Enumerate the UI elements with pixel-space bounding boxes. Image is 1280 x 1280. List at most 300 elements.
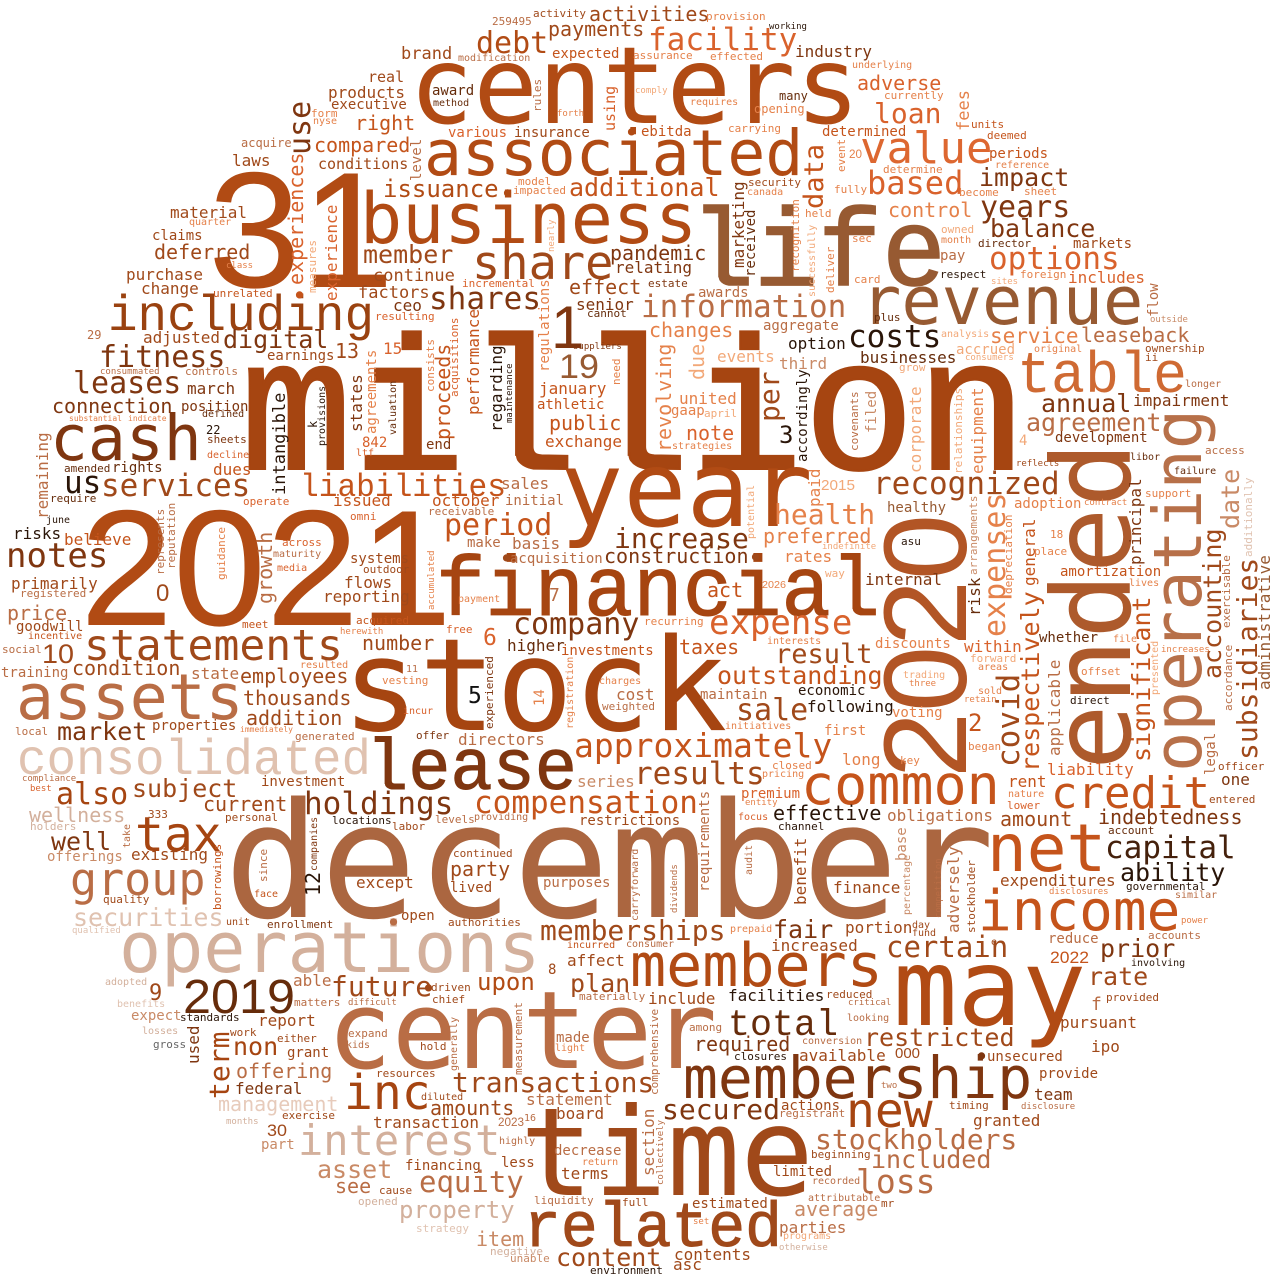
small words: centre: athletic xyxy=(537,397,604,413)
small words: centre: preferred xyxy=(763,524,871,548)
small words: left side: june xyxy=(46,515,70,526)
small words: left side: • xyxy=(292,281,307,310)
small words: centre: awards xyxy=(698,285,749,301)
small words: right side: within xyxy=(964,637,1022,656)
small words: centre: decrease xyxy=(554,1143,621,1159)
small words: centre: comprehensive xyxy=(648,1009,661,1095)
small words: right side: disclosure xyxy=(1021,1102,1075,1112)
small words: centre: effective xyxy=(773,801,881,825)
small words: right side: prior xyxy=(1100,934,1175,963)
small words: right side: adoption xyxy=(1014,496,1081,512)
small words: centre: actions xyxy=(781,1098,840,1114)
small words: left side: used xyxy=(184,1025,203,1064)
small words: right side: subsidiaries xyxy=(1231,558,1264,760)
small words: top arc: held xyxy=(805,207,832,220)
small words: top arc: 259495 xyxy=(492,15,532,28)
small words: left side: 13 xyxy=(335,339,359,363)
small words: left side: connection xyxy=(52,394,172,418)
small words: top arc: event xyxy=(835,139,848,172)
small words: top arc: data xyxy=(799,144,830,209)
small words: centre: accordingly xyxy=(795,369,811,462)
small words: centre: free xyxy=(446,623,472,636)
small words: right side: accounts xyxy=(1148,929,1201,942)
small words: left side: leases xyxy=(73,366,181,401)
small words: left side: locations xyxy=(332,814,392,827)
small words: left side: earnings xyxy=(267,348,334,364)
small words: left side: employees xyxy=(240,664,348,688)
small words: centre: • xyxy=(499,544,514,573)
small words: left side: qualified xyxy=(72,926,121,936)
small words: top arc xyxy=(232,2,1188,325)
small words: centre: providing xyxy=(474,812,528,823)
small words: centre: note xyxy=(686,421,734,445)
small words: left side: since xyxy=(257,849,270,882)
small words: right side: applicable xyxy=(1045,660,1064,756)
small words: right side: accounting xyxy=(1198,528,1227,679)
small words: centre: 19 xyxy=(559,348,599,386)
small words: right side: offset xyxy=(1081,665,1121,678)
small words: top arc: received xyxy=(743,210,759,277)
small words: left side: experience xyxy=(322,205,341,301)
small words: centre: chief xyxy=(432,993,465,1006)
small words: centre: regulations xyxy=(537,279,553,372)
small words: left side: transaction xyxy=(373,1113,479,1132)
small words: centre: made xyxy=(556,1030,590,1046)
small words: right side: timing xyxy=(949,1099,989,1112)
small words: left side: 10 xyxy=(42,639,74,669)
small words: top arc: markets xyxy=(1073,236,1132,252)
small words: right side: amortization xyxy=(1060,564,1161,580)
small words: right side: reflects xyxy=(1016,459,1059,469)
small words: left side: part xyxy=(261,1137,295,1153)
small words: centre: proceeds xyxy=(431,344,455,440)
small words: right side: liability xyxy=(1047,760,1134,779)
small words: top arc: additional xyxy=(569,173,720,202)
small words: right side: parties xyxy=(779,1218,846,1237)
small words: left side: k xyxy=(306,420,320,428)
small words: centre: end xyxy=(426,437,451,453)
small words: left side: reputation xyxy=(165,503,178,569)
small words: centre: secured xyxy=(662,1093,780,1126)
small words: right side: annual xyxy=(1041,389,1131,418)
small words: right side: date xyxy=(1216,469,1245,529)
small words: right side: respectively xyxy=(1016,591,1045,772)
small words: top arc: loan xyxy=(874,97,941,130)
small words: centre: driven xyxy=(431,981,471,994)
small words: centre: audit xyxy=(744,845,755,875)
small words: right side: restricted xyxy=(864,1023,1015,1052)
small words: right side: capital xyxy=(1105,830,1236,866)
small words: top arc: nyse xyxy=(313,116,337,127)
small words: centre: acquisitions xyxy=(448,318,461,397)
small words: top arc: payments xyxy=(548,17,644,41)
small words: left side: • xyxy=(386,908,401,937)
small words: right side: unsecured xyxy=(987,1049,1063,1065)
small words: centre: construction xyxy=(604,544,748,568)
word: year: year xyxy=(560,429,813,551)
small words: centre: less xyxy=(501,1155,535,1171)
small words: centre: suppliers xyxy=(573,342,622,352)
small words: right side: accrued xyxy=(956,342,1015,358)
word: consolidated: consolidated xyxy=(17,733,371,790)
small words: left side: goodwill xyxy=(16,619,83,635)
small words: left side: risks xyxy=(13,524,61,543)
small words: right side: filed xyxy=(864,391,880,433)
small words: right side: grow xyxy=(899,361,926,374)
small words: left side: well xyxy=(51,827,111,856)
small words: right side: voting xyxy=(892,705,943,721)
small words: centre: return xyxy=(582,1157,618,1168)
small words: centre: 7 xyxy=(549,585,560,606)
small words: centre: effect xyxy=(569,275,641,299)
small words: right side: healthy xyxy=(887,500,946,516)
small words: left side: financing xyxy=(405,1158,481,1174)
small words: left side: securities xyxy=(73,903,224,932)
small words: centre: closures xyxy=(734,1050,787,1063)
small words: right side: retain xyxy=(964,695,997,705)
small words: left side: dues xyxy=(213,460,252,479)
small words: top arc: sec xyxy=(852,232,872,245)
small words: centre: october xyxy=(432,491,500,510)
small words: top arc: flow xyxy=(1146,283,1162,317)
small words: centre: outstanding xyxy=(717,661,883,690)
small words: centre: shares xyxy=(429,281,541,317)
small words: centre: performance xyxy=(464,309,483,415)
small words: right side: areas xyxy=(978,662,1008,673)
small words: centre: series xyxy=(577,772,635,791)
small words: top arc: real xyxy=(368,68,404,86)
small words: centre: option xyxy=(788,334,846,353)
small words: centre: authorities xyxy=(448,916,521,929)
small words: centre: entity xyxy=(745,798,778,808)
small words: left side: material xyxy=(170,203,247,222)
small words: right side: failure xyxy=(1174,466,1216,477)
small words: right side: recognized xyxy=(873,466,1060,502)
small words: centre: estimated xyxy=(692,1196,768,1212)
small words: top arc: use xyxy=(283,101,318,155)
small words: right side: forward xyxy=(970,652,1016,665)
small words: centre: fair xyxy=(773,915,833,944)
word: associated: associated xyxy=(424,117,803,190)
small words: right side: governmental xyxy=(1126,880,1205,893)
small words: centre: taxes xyxy=(679,635,739,659)
small words: right side: credit xyxy=(1051,768,1210,819)
small words: right side: leaseback xyxy=(1081,323,1189,347)
small words: top arc: owned xyxy=(941,223,974,236)
small words: left side: claims xyxy=(152,228,203,244)
small words: right side: nature xyxy=(1008,789,1044,800)
small words: left side: see xyxy=(335,1174,371,1198)
small words: right side: asu xyxy=(901,535,921,548)
word: may: may xyxy=(893,927,1086,1051)
small words: left side: growth xyxy=(253,532,277,604)
small words: right side: base xyxy=(894,827,910,861)
small words: top arc: compared xyxy=(314,133,410,157)
small words: left side: group xyxy=(70,853,205,906)
small words: right side: depreciation xyxy=(1002,515,1015,594)
small words: right side: legal xyxy=(1203,733,1219,775)
small words: right side: e xyxy=(991,937,997,948)
small words: left side: opened xyxy=(358,1195,398,1208)
small words: centre: light xyxy=(555,1043,585,1054)
small words: centre: amounts xyxy=(430,1096,514,1120)
small words: left side: position xyxy=(181,399,248,415)
small words: centre: indefinite xyxy=(822,542,876,552)
small words: centre: 6 xyxy=(483,625,497,651)
small words: right side: 000 xyxy=(895,1045,920,1062)
small words: left side: offering xyxy=(236,1059,332,1083)
small words: left side: represents xyxy=(154,509,167,575)
small words: top arc: activities xyxy=(589,2,709,26)
small words: right side: development xyxy=(1055,430,1148,446)
small words: left side: factors xyxy=(358,283,430,303)
small words: left side: adopted xyxy=(105,977,147,988)
small words: centre: potential xyxy=(746,485,757,539)
small words: centre: following xyxy=(807,697,894,716)
small words: centre: higher xyxy=(507,636,565,655)
small words: centre: purposes xyxy=(543,875,610,891)
small words: centre: regarding xyxy=(487,345,506,432)
small words: left side: federal xyxy=(235,1079,302,1098)
small words: left side: indicate xyxy=(128,414,167,423)
small words: left side: local xyxy=(15,725,48,738)
small words: left side: quarter xyxy=(189,217,231,228)
small words: centre: item xyxy=(476,1227,524,1251)
small words: left side: matters xyxy=(294,996,340,1009)
small words: right side: direct xyxy=(1070,694,1110,707)
small words: right side: accordance xyxy=(1222,645,1235,711)
small words: right side: mr xyxy=(881,1197,895,1210)
word: members: members xyxy=(630,931,883,1001)
small words: left side: quality xyxy=(103,893,150,906)
small words: left side: market xyxy=(57,717,147,746)
small words: left side: controls xyxy=(185,365,238,378)
small words: top arc: sheet xyxy=(1024,185,1057,198)
small words: left side: 22 xyxy=(206,423,220,437)
small words: centre: health xyxy=(774,498,875,531)
small words: top arc: industry xyxy=(795,42,872,61)
small words: right side: granted xyxy=(973,1111,1040,1130)
small words: left side: across xyxy=(282,536,322,549)
small words: left side: 29 xyxy=(87,328,101,342)
small words: right side: finance xyxy=(833,878,900,897)
small words: centre: set xyxy=(693,1217,709,1227)
small words: left side: class xyxy=(226,261,253,271)
small words: centre: statement xyxy=(526,1090,613,1109)
small words: right side: expenses xyxy=(978,492,1013,637)
small words: top arc: activity xyxy=(533,7,586,20)
small words: centre: channel xyxy=(778,820,824,833)
small words: left side: systems xyxy=(350,551,409,567)
small words: left side: immediately xyxy=(240,725,293,734)
word: life: life xyxy=(690,194,946,319)
small words: right side: analysis xyxy=(941,329,989,340)
small words: left side: also xyxy=(56,777,128,812)
small words: left side: equity xyxy=(419,1165,524,1199)
small words: left side: media xyxy=(277,563,307,574)
small words: centre: acquisition xyxy=(510,551,603,567)
small words: right side: relationships xyxy=(952,388,965,474)
small words: centre: exchange xyxy=(545,432,622,451)
small words: centre: 16 xyxy=(524,1113,536,1124)
word: membership: membership xyxy=(683,1044,1032,1112)
small words: left side: number xyxy=(362,631,434,655)
small words: left side: unit xyxy=(226,917,250,928)
small words: top arc: 20 xyxy=(849,149,862,161)
small words: right side: key xyxy=(900,754,920,767)
small words: top arc: carrying xyxy=(728,122,781,135)
small words: top arc: method xyxy=(433,98,469,109)
small words: top arc: pay xyxy=(940,248,965,264)
small words: left side: management xyxy=(218,1092,338,1116)
small words: centre: dividends xyxy=(670,864,680,913)
small words: centre: recurring xyxy=(644,615,704,628)
small words: top arc: sites xyxy=(991,277,1018,287)
small words: right side: service xyxy=(990,324,1079,348)
small words: top arc: effected xyxy=(710,50,763,63)
small words: centre: 5 xyxy=(468,683,482,709)
small words: centre: result xyxy=(775,639,873,670)
small words: left side: decline xyxy=(207,450,249,461)
small words: top arc: rules xyxy=(531,79,544,112)
small words: top arc: determine xyxy=(883,163,943,176)
small words: left side: current xyxy=(203,792,287,816)
small words: right side: discounts xyxy=(875,636,951,652)
small words: right side: programs xyxy=(783,1231,831,1242)
small words: left side: face xyxy=(254,889,278,900)
small words: centre: contents xyxy=(674,1245,751,1264)
small words: centre: compensation xyxy=(474,785,698,821)
small words: centre: cannot xyxy=(587,307,627,320)
small words: centre: 2015 xyxy=(821,477,855,494)
small words: left side: operate xyxy=(243,495,289,508)
small words: right side: ownership xyxy=(1145,342,1205,355)
small words: top arc: underlying xyxy=(852,60,912,71)
small words: centre: sales xyxy=(501,474,549,493)
small words: right side: significant xyxy=(1127,596,1156,762)
small words: right side: pursuant xyxy=(1060,1013,1137,1032)
small words: centre: directors xyxy=(458,730,545,749)
small words: left side: sheets xyxy=(207,433,247,446)
small words: top arc: provision xyxy=(706,10,766,23)
small words: right side: access xyxy=(1205,444,1245,457)
small words: centre: 2023 xyxy=(498,1117,524,1129)
small words: left side: future xyxy=(331,970,432,1003)
small words: centre: prepaid xyxy=(730,924,772,935)
small words: top arc: acquire xyxy=(241,136,292,150)
small words: right side: limited xyxy=(773,1164,832,1180)
small words: centre: estate xyxy=(648,277,688,290)
small words: centre: 14 xyxy=(532,689,548,706)
small words: centre: interests xyxy=(767,636,821,647)
small words: centre: aggregate xyxy=(763,318,839,334)
small words: top arc: periods xyxy=(989,146,1048,162)
small words: left side: benefits xyxy=(117,999,165,1010)
small words: top arc: month xyxy=(941,235,971,246)
small words: right side: equipment xyxy=(968,387,987,474)
small words: left side: meet xyxy=(242,618,268,631)
small words: top arc: options xyxy=(989,241,1120,277)
small words: centre: per xyxy=(753,371,786,422)
small words: right side: fund xyxy=(912,928,936,939)
small words: right side: support xyxy=(1145,487,1191,500)
small words: centre: facilities xyxy=(728,986,824,1005)
small words: top arc: right xyxy=(355,111,415,135)
small words: left side: take xyxy=(122,824,133,848)
small words: centre: changes xyxy=(649,318,733,342)
small words: left side: interest xyxy=(298,1116,500,1165)
small words: centre: sale xyxy=(736,693,808,728)
word: centers: centers xyxy=(409,25,860,149)
small words: left side: services xyxy=(101,468,250,504)
small words: left side: reporting xyxy=(323,587,410,606)
small words: centre: gaap xyxy=(671,403,705,419)
small words: top arc: control xyxy=(888,198,972,222)
small words: centre: public xyxy=(549,411,621,435)
small words: centre: asc xyxy=(673,1255,702,1274)
small words: right side: percentage xyxy=(902,855,913,915)
small words: right side: two xyxy=(881,1081,897,1091)
small words: left side: ceo xyxy=(393,296,422,315)
word: 2020: 2020 xyxy=(860,514,992,778)
small words: right side: available xyxy=(799,1046,886,1065)
small words: centre: act xyxy=(707,578,743,602)
small words: centre: offer xyxy=(416,729,449,742)
small words: left side: able xyxy=(293,971,332,990)
small words: left side: outdoor xyxy=(363,563,410,576)
small words: left side: 333 xyxy=(148,808,168,821)
small words: left side: 2019 xyxy=(183,971,295,1024)
small words: right side: covid xyxy=(991,674,1027,767)
small words: left side: holders xyxy=(30,820,76,833)
small words: left side: resulting xyxy=(375,310,435,323)
small words: right side: average xyxy=(794,1197,878,1221)
small words: left side: expect xyxy=(131,1008,182,1024)
word: revenue: revenue xyxy=(861,262,1143,340)
small words: left side: 9 xyxy=(149,981,162,1006)
small words: left side: social xyxy=(2,643,42,656)
small words: left side: rights xyxy=(112,460,163,476)
small words: centre: weighted xyxy=(602,700,655,713)
small words: centre: initial xyxy=(505,493,564,509)
small words: top arc: ebitda xyxy=(641,124,692,140)
small words: centre: information xyxy=(641,289,846,325)
small words: left side: resulted xyxy=(300,660,348,671)
small words: top arc: form xyxy=(311,107,338,120)
small words: centre: increase xyxy=(614,522,749,555)
small words: centre: third xyxy=(779,354,827,373)
small words: left side: companies xyxy=(309,817,320,871)
small words: left side: enrollment xyxy=(267,918,333,931)
small words: left side: purchase xyxy=(126,265,203,284)
small words: centre: accumulated xyxy=(427,550,437,610)
small words: centre: full xyxy=(622,1196,648,1209)
small words: centre: continued xyxy=(453,847,513,860)
small words: centre: economic xyxy=(798,683,865,699)
small words: top arc: debt xyxy=(476,26,548,61)
small words: left side: best xyxy=(30,784,52,794)
small words: centre: focus xyxy=(738,812,768,823)
small words: left side: incur xyxy=(403,706,433,717)
small words: centre: maintain xyxy=(700,687,767,703)
small words: top arc: adverse xyxy=(857,71,941,95)
small words: right side: lives xyxy=(1129,578,1159,589)
small words: centre: events xyxy=(717,347,775,366)
small words: right side: principal xyxy=(1126,478,1145,565)
small words: left side: non xyxy=(233,1032,278,1061)
small words: centre: board xyxy=(556,1104,604,1123)
small words: top arc: products xyxy=(328,83,405,102)
